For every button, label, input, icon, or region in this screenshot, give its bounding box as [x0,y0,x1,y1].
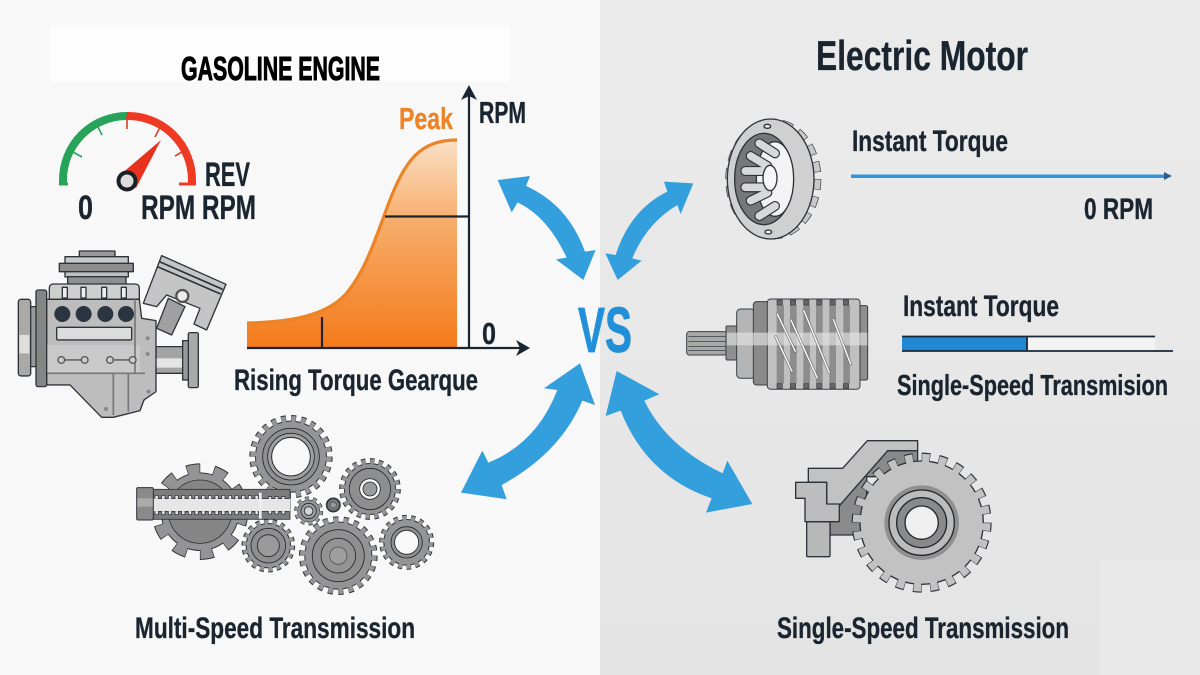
caption: single-speed transmission (bottom): Single-Speed Transmission [777,612,1069,645]
gear: lower middle [244,521,293,570]
icon: single-speed gear with housing [796,441,987,588]
chart: rising torque curve [247,85,530,356]
arrows: blue comparison arrows [461,176,752,513]
gauge label: 0: 0 [78,189,93,227]
arrow: top left [498,176,596,280]
shaft [137,488,290,520]
spur gear [857,458,987,588]
panel: gasoline engine background [0,0,600,675]
bar: torque progress [902,336,1173,351]
icon: electric motor stator ring [727,119,818,239]
title box: gasoline engine: GASOLINE ENGINE [181,50,380,87]
label: instant torque (top): Instant Torque [852,125,1008,158]
chart area [247,140,457,348]
chart curve [247,140,457,323]
gauge label: REV: REV [205,156,250,194]
gear: large left [157,468,243,555]
chart label: RPM: RPM [479,95,526,130]
gear: small pinion [296,498,321,524]
chart caption: Rising Torque Gearque [234,364,478,397]
arrow: instant torque line [851,172,1172,180]
arrow: top right [605,182,693,280]
chart label: 0: 0 [482,316,496,351]
chart axes [247,90,522,348]
gear: far right [382,517,432,567]
gear: lower large [302,520,374,592]
gauge: rev counter [59,116,196,190]
arrow: bottom left [461,363,595,499]
chart arrowheads [461,85,530,356]
label: VS: VS [578,294,632,366]
gear: upper right [342,461,398,517]
icon: multi-speed transmission gears [137,418,432,592]
label: instant torque (middle): Instant Torque [903,290,1059,323]
heading: electric motor: Electric Motor [816,32,1028,79]
small bearing [327,498,340,512]
gauge label: RPM RPM: RPM RPM [141,189,256,227]
panel: electric motor background [600,0,1200,675]
gear: top [253,418,329,495]
label: 0 RPM: 0 RPM [1084,193,1153,226]
icon: motor rotor [687,299,868,389]
icon: gasoline engine [18,251,226,417]
arrow: bottom right [606,371,752,513]
caption: multi-speed transmission: Multi-Speed Transmission [135,612,415,645]
chart label: Peak: Peak [399,101,454,136]
title box: gasoline engine [50,25,510,87]
